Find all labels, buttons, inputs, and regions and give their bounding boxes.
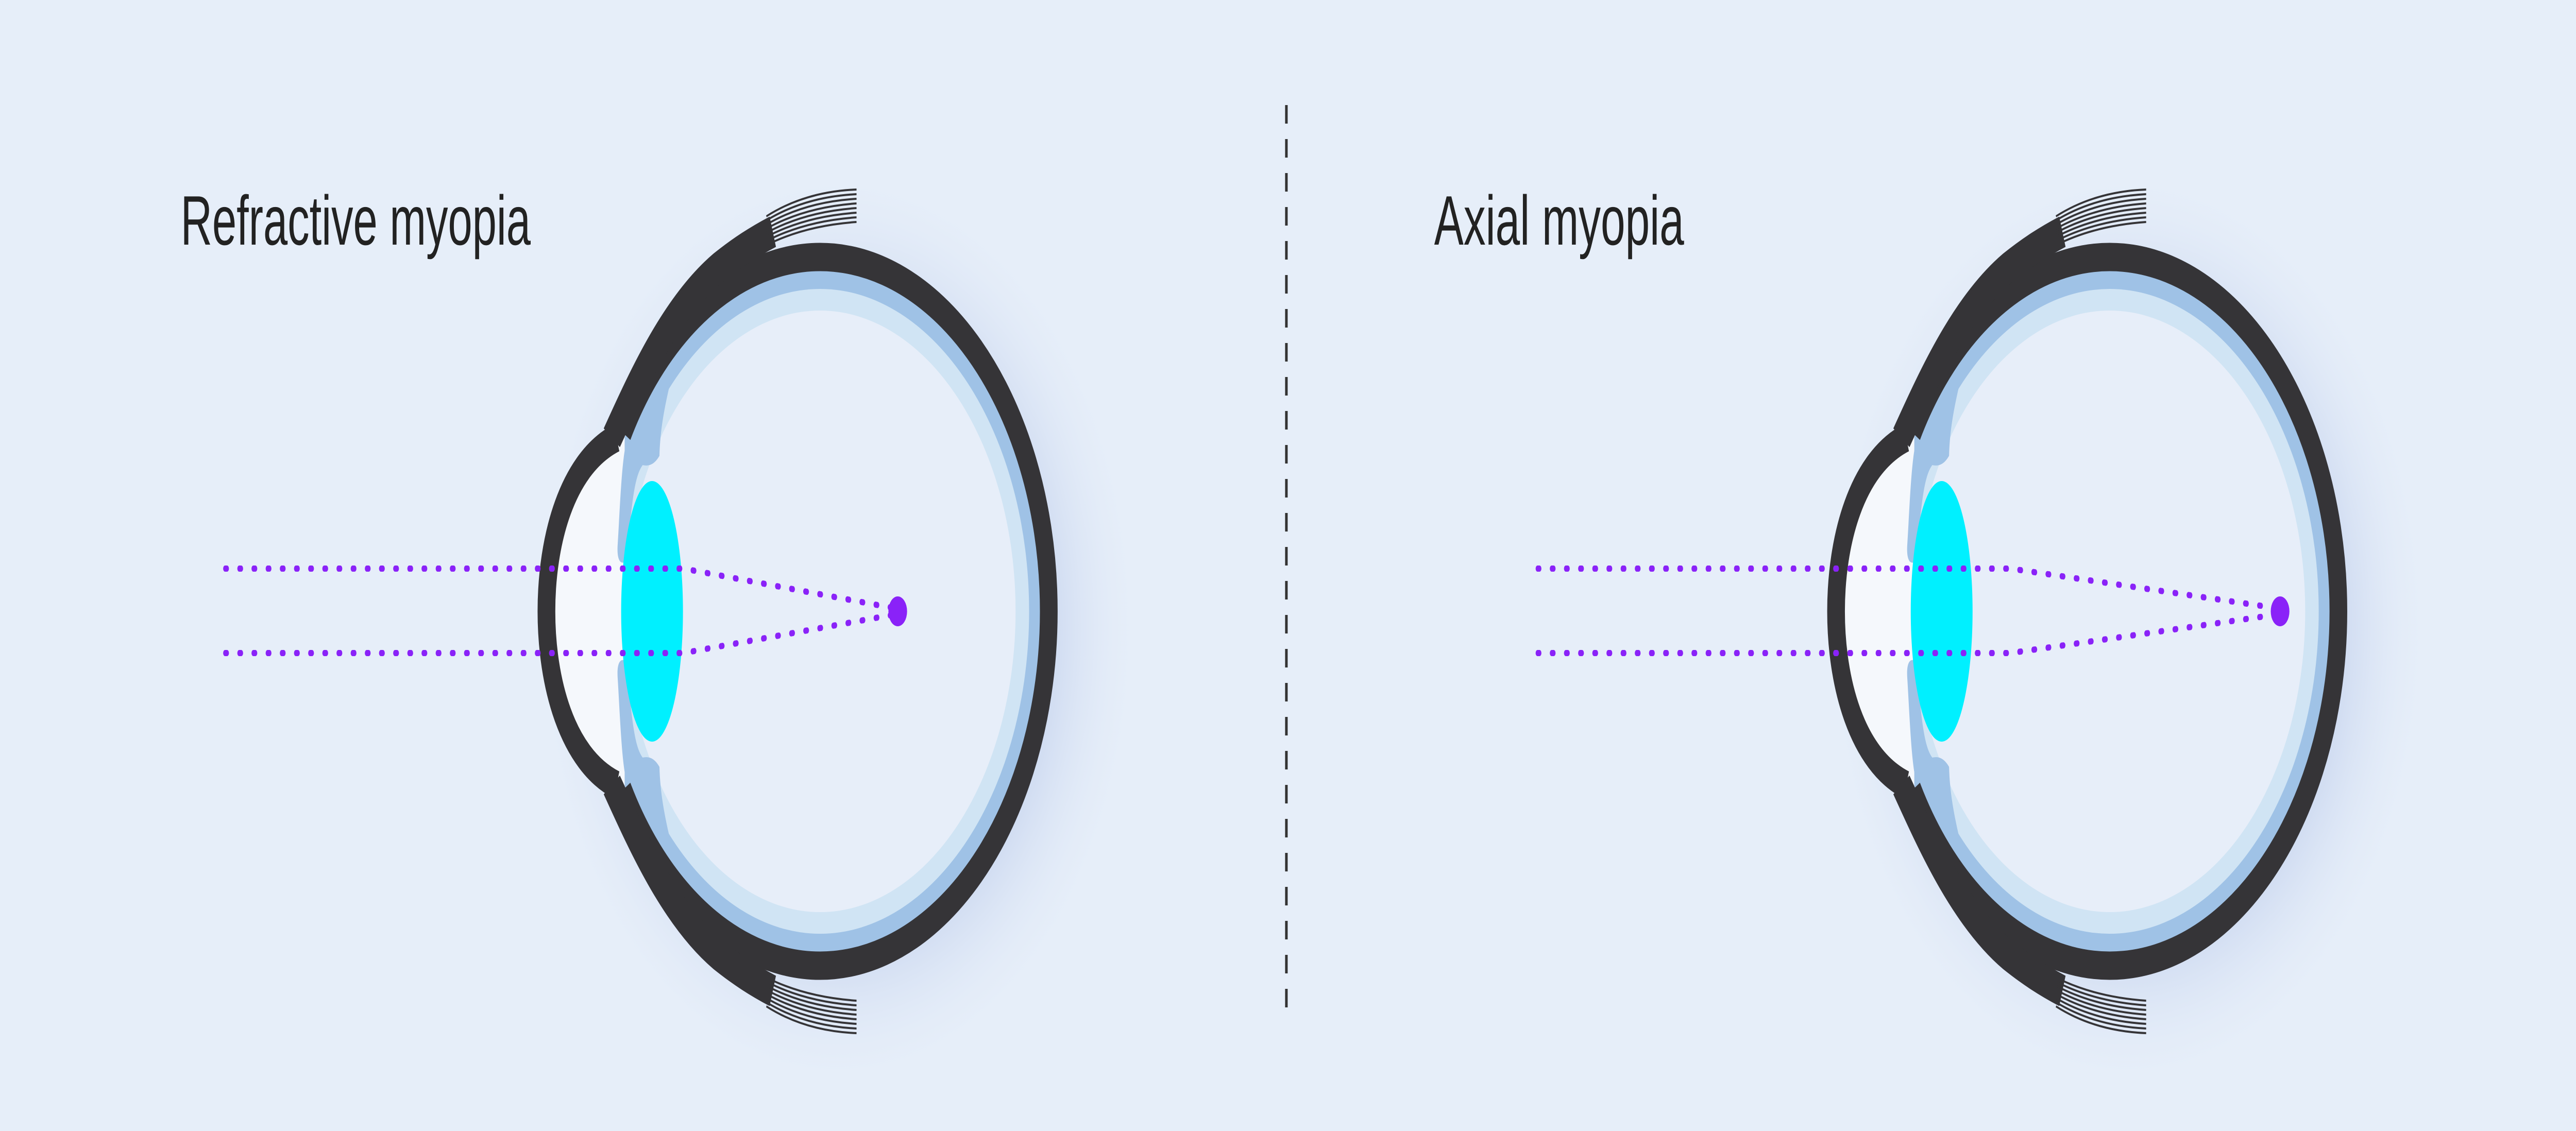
- eye: axial myopia: [1821, 165, 2433, 1092]
- focal point: refractive: [888, 596, 907, 626]
- title: refractive myopia: Refractive myopia: [181, 182, 531, 260]
- eye: refractive myopia: [531, 165, 1143, 1092]
- focal point: axial: [2271, 596, 2290, 626]
- divider: [1284, 105, 1289, 1020]
- light rays: refractive: [225, 569, 892, 653]
- light rays: axial: [1537, 569, 2274, 653]
- title: axial myopia: Axial myopia: [1434, 182, 1684, 260]
